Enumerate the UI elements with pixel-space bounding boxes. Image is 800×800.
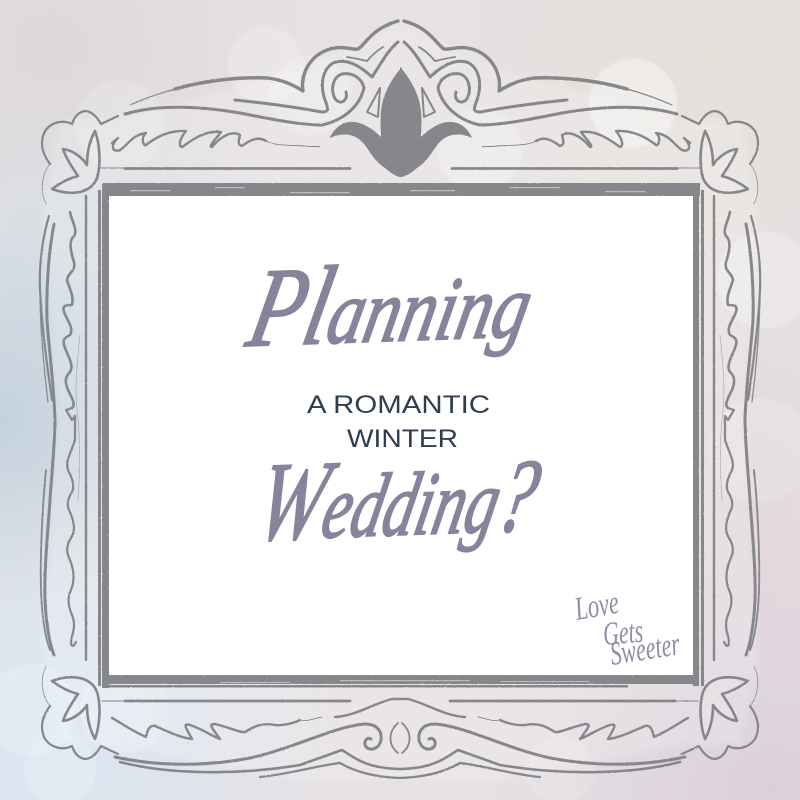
top ornament, left half [100,21,402,177]
band streaks [130,187,645,683]
subheading: WINTER [347,425,458,453]
logo: Love Gets Sweeter: Love [571,585,622,628]
subheading [307,391,490,453]
bottom ornament [102,699,400,778]
side ornaments [40,196,760,660]
heading: Planning: Planning [238,236,545,371]
logo: Love Gets Sweeter: Gets [602,614,645,653]
top ornament, right half [400,21,702,177]
logo: Love Gets Sweeter: Sweeter [608,626,682,673]
panel: white card [109,196,693,675]
corner flourishes [42,111,758,759]
inner brush border [98,183,704,688]
heading: Wedding?: Wedding? [247,430,551,565]
subheading: A ROMANTIC [307,391,490,419]
logo: Love Gets Sweeter [571,585,682,673]
icon: tulip half [330,67,402,177]
